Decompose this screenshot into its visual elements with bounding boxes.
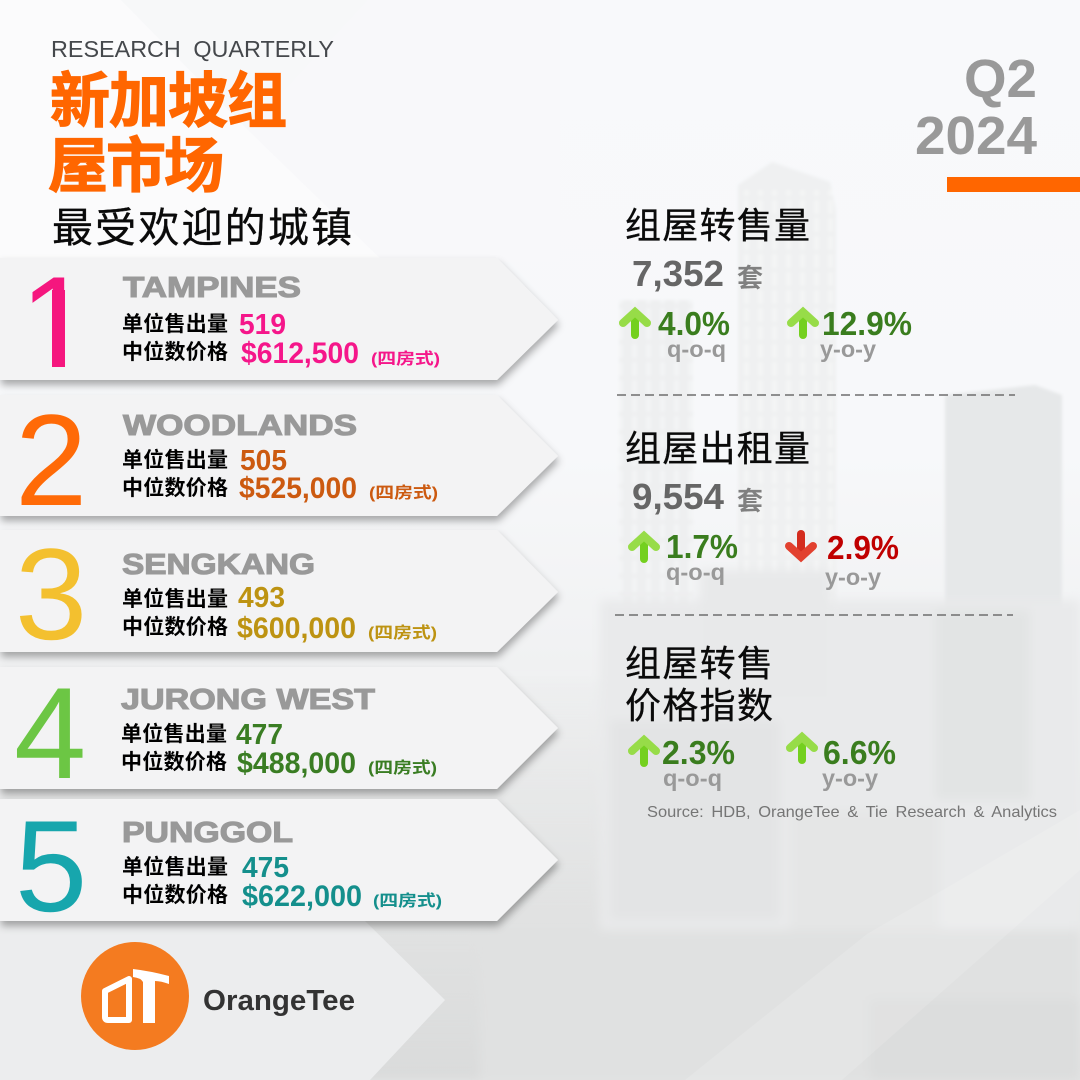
panel: rank 4 Jurong West: [0, 660, 558, 806]
panel: rank 4 Jurong West: 477: [236, 719, 283, 751]
source note: Source: HDB, OrangeTee & Tie Research & Analytics: [647, 804, 1057, 821]
panel: resale price index: 6.6%: [823, 734, 896, 771]
panel: rank 4 Jurong West: $488,000: [237, 747, 356, 780]
icon: up arrow: [632, 536, 656, 559]
panel: rank 2 Woodlands: (四房式): [369, 483, 438, 502]
panel: rank 3 Sengkang: [0, 521, 558, 667]
panel: rank 2 Woodlands: 中位数价格: [122, 476, 228, 500]
panel: resale volume: 4.0%: [658, 305, 730, 342]
panel: rank 3 Sengkang: (四房式): [368, 623, 437, 642]
panel: rank 1 Tampines: $612,500: [241, 337, 359, 370]
panel: rental volume: [625, 428, 899, 590]
logo: OrangeTee: [81, 942, 355, 1050]
panel: resale volume: [623, 205, 912, 362]
icon: down arrow: [789, 534, 813, 557]
panel: rental volume: y-o-y: [825, 564, 881, 590]
panel: rank 1 Tampines: 单位售出量: [122, 312, 228, 336]
panel: resale price index: 价格指数: [625, 685, 773, 726]
panel: resale volume: 组屋转售量: [625, 205, 810, 246]
panel: resale price index: y-o-y: [822, 765, 878, 791]
quarter badge: [915, 49, 1080, 192]
panel: resale price index: 组屋转售: [625, 643, 773, 684]
icon: up arrow: [791, 312, 815, 335]
logo: OrangeTee: OrangeTee: [203, 985, 355, 1017]
panel: rank 1 Tampines: 中位数价格: [122, 340, 228, 364]
panel: rank 5 Punggol: 中位数价格: [122, 883, 228, 907]
panel: rank 3 Sengkang: 单位售出量: [122, 587, 228, 611]
panel: rank 2 Woodlands: 505: [240, 445, 287, 477]
title: [48, 68, 287, 200]
panel: rank 4 Jurong West: 中位数价格: [121, 750, 227, 774]
panel: rental volume: 2.9%: [827, 529, 899, 566]
quarter badge: Q2: [964, 49, 1037, 109]
panel: resale price index: 2.3%: [662, 734, 735, 771]
panel: rental volume: q-o-q: [666, 559, 725, 585]
panel: rank 5 Punggol: 单位售出量: [122, 855, 228, 879]
icon: up arrow: [632, 740, 656, 763]
panel: resale price index: [625, 643, 896, 791]
panel: rank 3 Sengkang: 3: [15, 521, 87, 667]
panel: rank 4 Jurong West: JURONG WEST: [121, 684, 375, 716]
panel: rank 3 Sengkang: 中位数价格: [122, 615, 228, 639]
panel: rank 4 Jurong West: (四房式): [368, 758, 437, 777]
panel: rank 4 Jurong West: 4: [14, 660, 86, 806]
panel: rank 2 Woodlands: [0, 387, 558, 533]
panel: resale volume: 7,352: [632, 253, 724, 294]
panel: rank 1 Tampines: 519: [239, 309, 286, 341]
subtitle: 最受欢迎的城镇: [52, 205, 352, 251]
header text: [48, 36, 352, 251]
quarter badge: 2024: [915, 106, 1037, 166]
panel: rank 3 Sengkang: 493: [238, 582, 285, 614]
panel: rank 3 Sengkang: $600,000: [237, 612, 356, 645]
panel: rank 5 Punggol: [0, 793, 558, 939]
panel: rank 5 Punggol: PUNGGOL: [122, 817, 293, 849]
panel: resale volume: 套: [737, 263, 763, 293]
panel: rank 3 Sengkang: SENGKANG: [122, 549, 315, 581]
panel: resale price index: q-o-q: [663, 765, 722, 791]
label: research quarterly: RESEARCH QUARTERLY: [51, 36, 334, 62]
panel: rank 5 Punggol: 5: [15, 793, 87, 939]
title: 新加坡组: [50, 68, 287, 135]
panel: rank 2 Woodlands: 单位售出量: [122, 448, 228, 472]
panel: rank 5 Punggol: (四房式): [373, 891, 442, 910]
panel: rank 2 Woodlands: 2: [15, 387, 87, 533]
panel: rank 1 Tampines: (四房式): [371, 349, 440, 368]
panel: rank 1 Tampines: 1: [20, 249, 92, 395]
panel: rank 5 Punggol: $622,000: [242, 880, 362, 913]
panel: resale volume: q-o-q: [667, 336, 726, 362]
panel: rank 2 Woodlands: $525,000: [239, 472, 357, 505]
panel: rental volume: 套: [737, 486, 763, 516]
icon: up arrow: [790, 737, 814, 760]
panel: rental volume: 9,554: [632, 476, 724, 517]
panel: rank 4 Jurong West: 单位售出量: [121, 722, 227, 746]
panel: rank 1 Tampines: [0, 260, 562, 390]
panel: resale volume: 12.9%: [822, 305, 912, 342]
title: 屋市场: [48, 133, 224, 200]
panel: rental volume: 组屋出租量: [625, 428, 810, 469]
panel: resale volume: y-o-y: [820, 336, 876, 362]
panel: rank 2 Woodlands: WOODLANDS: [123, 410, 357, 442]
panel: rank 1 Tampines: TAMPINES: [123, 272, 301, 304]
icon: up arrow: [623, 312, 647, 335]
panel: rank 5 Punggol: 475: [242, 852, 289, 884]
panel: rental volume: 1.7%: [666, 528, 738, 565]
